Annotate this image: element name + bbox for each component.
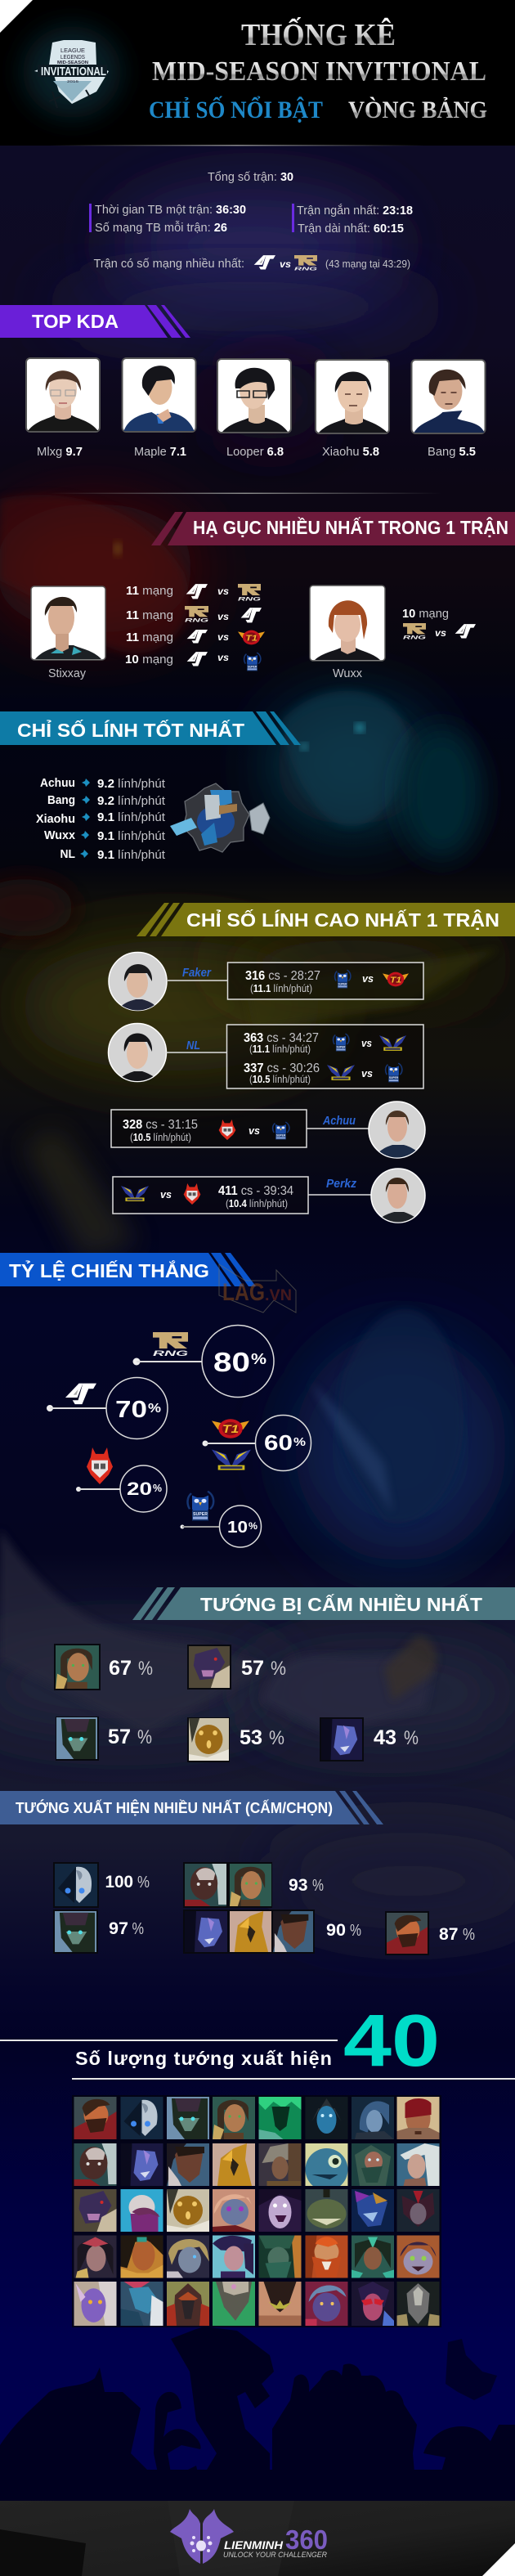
win rate: CLG 70%	[47, 1377, 168, 1439]
corner notch top left	[0, 0, 33, 33]
CS record: Achuu: Achuu	[322, 1114, 356, 1128]
footer logo: LIENMINH	[224, 2538, 284, 2551]
banner: most banned	[132, 1587, 515, 1620]
Stixxay name: Stixxay	[48, 666, 86, 680]
win rate: RNG 80%	[132, 1325, 274, 1397]
win rate: RNG 80%: %	[251, 1351, 266, 1367]
watermark: .VN	[265, 1287, 292, 1304]
CS record: Perkz: (10.4 lính/phút)	[226, 1197, 288, 1209]
most banned champions: 43	[374, 1726, 396, 1749]
CS ranking list: 9.1 lính/phút	[97, 848, 166, 862]
banner: highest CS: CHỈ SỐ LÍNH CAO NHẤT 1 TRẬN	[186, 908, 499, 931]
KDA names	[37, 445, 476, 459]
CS record: Achuu: vs	[249, 1124, 260, 1137]
MSI logo: 2016	[67, 79, 79, 83]
MSI logo	[23, 26, 121, 118]
win rate: SKT and FW 60%: 60	[264, 1430, 293, 1455]
kills list: Stixxay	[125, 584, 265, 671]
title: CHỈ SỐ NỔI BẬT	[149, 96, 323, 123]
banner: most kills	[151, 512, 515, 545]
most banned champions: %	[137, 1726, 152, 1748]
CS record: Achuu	[111, 1102, 425, 1161]
most banned champions	[54, 1644, 419, 1762]
CS record: NL: vs	[361, 1037, 372, 1049]
kills list: Stixxay: vs	[217, 631, 229, 643]
KDA names: Xiaohu 5.8	[322, 445, 379, 459]
win rate: SKT and FW 60%: %	[293, 1435, 306, 1449]
banner: best CS: CHỈ SỐ LÍNH TỐT NHẤT	[17, 718, 244, 741]
player card: Wuxx	[310, 586, 385, 661]
banner: top KDA	[0, 305, 190, 338]
kills list: Stixxay: 11 mạng	[126, 631, 173, 644]
win rate: G2 20%: %	[153, 1482, 162, 1494]
player card: Looper	[217, 359, 291, 433]
CS record: Perkz: vs	[160, 1188, 172, 1200]
most present champions: 87	[439, 1925, 458, 1944]
CS ranking list: Bang	[47, 793, 75, 807]
player card: Stixxay	[31, 586, 105, 660]
champion grid	[72, 2095, 441, 2327]
overview stats: Thời gian TB một trận: 36:30	[95, 203, 246, 217]
footer panel	[0, 2501, 515, 2576]
KDA names: Looper 6.8	[226, 445, 284, 459]
CS ranking list: 9.1 lính/phút	[97, 810, 166, 824]
most banned champions: %	[269, 1727, 284, 1749]
most present champions: 90	[326, 1921, 346, 1940]
player card: Mlxg	[26, 358, 100, 432]
most present champions: 100	[105, 1873, 133, 1892]
watermark: LAG	[222, 1279, 265, 1306]
CS ranking list: 9.2 lính/phút	[97, 794, 166, 808]
CS record: Faker: Faker	[182, 966, 212, 980]
most present champions: %	[350, 1922, 361, 1940]
win rate: SS 10%	[180, 1492, 262, 1547]
overview stats: vs	[280, 258, 291, 270]
footer logo	[170, 2509, 328, 2564]
CS record: Perkz: 411 cs - 39:34	[218, 1184, 293, 1198]
kills list: Stixxay: 11 mạng	[126, 608, 173, 622]
overview stats: Trận dài nhất: 60:15	[298, 222, 404, 236]
CS record: NL: NL	[186, 1039, 200, 1052]
CS record: NL	[108, 1024, 423, 1088]
CS record: Perkz	[113, 1169, 425, 1225]
CS record: Faker: 316 cs - 28:27	[245, 969, 320, 983]
most banned champions: %	[138, 1658, 153, 1680]
footer logo: UNLOCK YOUR CHALLENGER	[223, 2551, 327, 2560]
most banned champions: 57	[241, 1657, 264, 1680]
player card: Maple	[123, 358, 196, 432]
kills list: Wuxx: vs	[435, 627, 446, 639]
CS record: Achuu: 328 cs - 31:15	[123, 1118, 198, 1132]
CS ranking list: Xiaohu	[36, 812, 75, 826]
win rate: SS 10%: 10	[227, 1519, 248, 1537]
CS record: NL: (11.1 lính/phút)	[249, 1043, 311, 1055]
MSI logo: LEAGUE	[60, 47, 85, 54]
overview stats: Số mạng TB mỗi trận: 26	[95, 221, 227, 235]
MSI logo: INVITATIONAL	[41, 65, 106, 79]
title: MID-SEASON INVITIONAL	[152, 56, 486, 87]
CS record: NL: vs	[361, 1067, 373, 1079]
heading: champion count: 40	[343, 2000, 440, 2082]
banner: highest CS	[137, 903, 515, 936]
CS record: Perkz: Perkz	[326, 1177, 356, 1191]
player card: Xiaohu	[316, 360, 389, 433]
overview stats: Trận ngắn nhất: 23:18	[297, 204, 413, 218]
CS record: Achuu: (10.5 lính/phút)	[130, 1131, 191, 1143]
watermark	[219, 1264, 296, 1313]
CS record: Faker	[109, 952, 423, 1014]
title: THỐNG KÊ	[241, 16, 396, 52]
most present champions: %	[463, 1926, 475, 1944]
overview stats	[89, 171, 413, 272]
CS ranking list: Wuxx	[44, 828, 76, 842]
kills list: Stixxay: 10 mạng	[125, 653, 173, 666]
win rate: CLG 70%: 70	[115, 1397, 147, 1423]
most banned champions: 53	[240, 1726, 262, 1749]
banner: most present: TƯỚNG XUẤT HIỆN NHIỀU NHẤT (CẤM/CHỌN)	[16, 1799, 333, 1816]
CS record: NL: 337 cs - 30:26	[244, 1061, 320, 1075]
banner: best CS	[0, 711, 301, 745]
CS ranking list: 9.1 lính/phút	[97, 829, 166, 843]
banner: top KDA: TOP KDA	[32, 311, 119, 332]
most present champions	[53, 1862, 475, 1955]
heading: champion count: Số lượng tướng xuất hiện	[75, 2048, 333, 2069]
header panel	[0, 0, 515, 146]
win rate: G2 20%	[76, 1447, 167, 1512]
CS ranking list	[36, 776, 166, 862]
MSI logo: LEGENDS	[60, 53, 85, 61]
overview stats: Tổng số trận: 30	[208, 171, 293, 184]
CS record: Faker: (11.1 lính/phút)	[250, 982, 312, 994]
player card: Bang	[412, 360, 486, 433]
win rate: G2 20%: 20	[127, 1479, 152, 1499]
CS record: NL: 363 cs - 34:27	[244, 1031, 319, 1045]
icon: minion medallion	[170, 783, 270, 852]
kills list: Stixxay: vs	[217, 586, 229, 597]
banner: most present	[0, 1791, 383, 1824]
win rate: RNG 80%: 80	[213, 1347, 250, 1377]
title: VÒNG BẢNG	[348, 96, 487, 123]
most present champions: 93	[289, 1876, 307, 1895]
banner: most banned: TƯỚNG BỊ CẤM NHIỀU NHẤT	[200, 1593, 482, 1615]
CS ranking list: Achuu	[40, 776, 75, 790]
kills list: Stixxay: vs	[217, 611, 229, 622]
most present champions: %	[312, 1877, 324, 1895]
KDA names: Maple 7.1	[134, 445, 186, 459]
win rate: SKT and FW 60%	[203, 1415, 311, 1470]
CS ranking list: NL	[60, 847, 75, 861]
bottom silhouettes	[0, 2327, 515, 2501]
footer logo: 360	[285, 2524, 328, 2555]
most banned champions: %	[271, 1658, 286, 1680]
KDA names: Mlxg 9.7	[37, 445, 83, 459]
title	[149, 16, 487, 123]
kills list: Stixxay: 11 mạng	[126, 584, 173, 598]
MSI logo: MID-SEASON	[57, 61, 88, 65]
CS ranking list: 9.2 lính/phút	[97, 777, 166, 791]
KDA names: Bang 5.5	[428, 445, 476, 459]
most banned champions: 57	[108, 1726, 131, 1748]
corner notch bottom right	[482, 2543, 515, 2576]
kills list: Stixxay: vs	[217, 652, 229, 663]
win rate: CLG 70%: %	[148, 1402, 161, 1416]
kills list: Wuxx	[402, 607, 476, 640]
CS record: Faker: vs	[362, 972, 374, 985]
most banned champions: %	[404, 1727, 419, 1749]
most present champions: 97	[109, 1919, 128, 1938]
most present champions: %	[137, 1874, 150, 1892]
banner: win rate	[0, 1253, 256, 1286]
most banned champions: 67	[109, 1657, 132, 1680]
kills list: Wuxx: 10 mạng	[402, 607, 449, 621]
win rate: SS 10%: %	[249, 1520, 258, 1532]
most present champions: %	[132, 1920, 144, 1938]
Wuxx name: Wuxx	[333, 666, 362, 680]
banner: win rate: TỶ LỆ CHIẾN THẮNG	[9, 1259, 209, 1281]
overview stats: (43 mạng tại 43:29)	[325, 258, 410, 270]
heading: champion count	[0, 2000, 515, 2082]
CS record: NL: (10.5 lính/phút)	[249, 1073, 311, 1085]
header divider	[49, 145, 425, 146]
overview stats: Trận có số mạng nhiều nhất:	[93, 257, 244, 271]
